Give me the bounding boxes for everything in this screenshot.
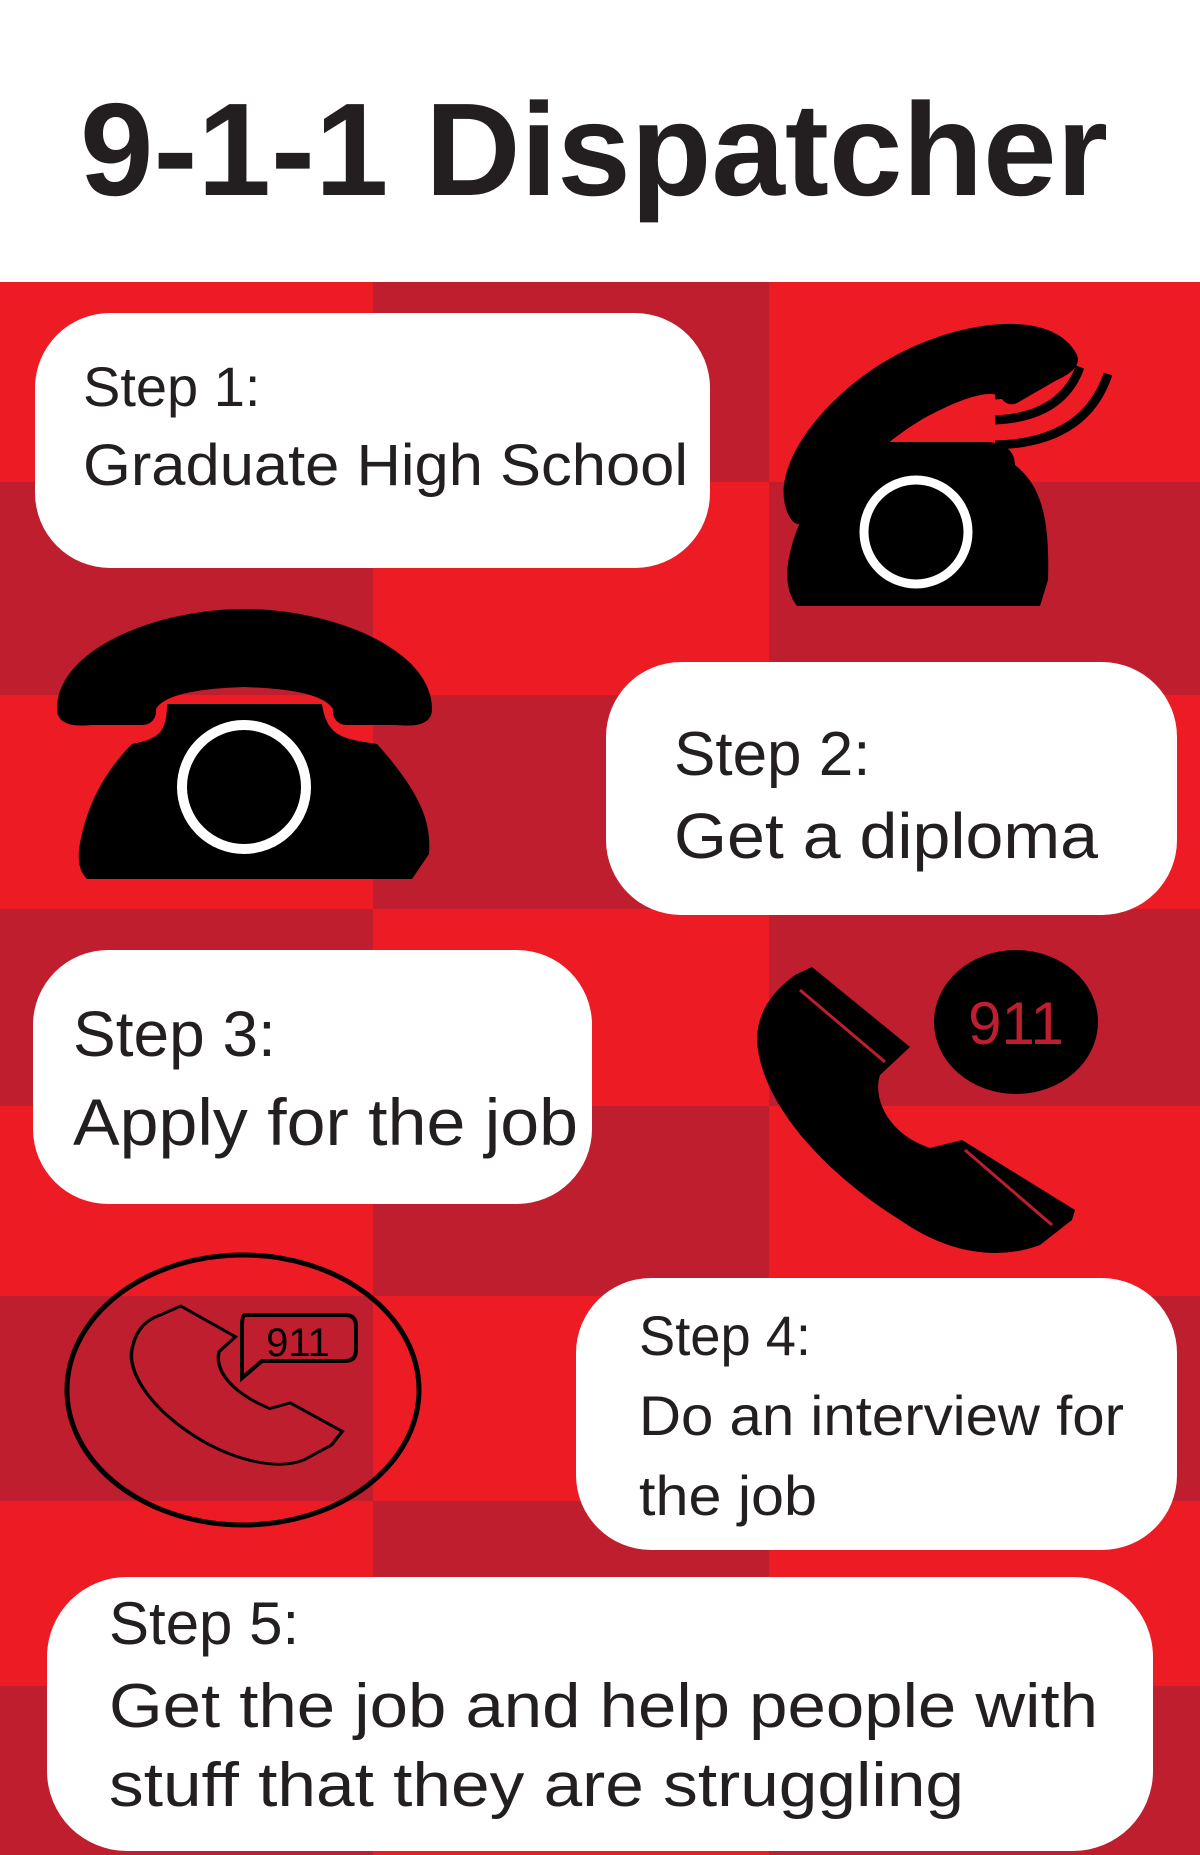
panel: step 2 bbox=[606, 662, 1177, 915]
panel: step 4: the job bbox=[639, 1464, 817, 1527]
panel: step 5: Get the job and help people with bbox=[109, 1672, 1098, 1741]
panel: step 1 bbox=[35, 313, 710, 568]
panel: step 1: Graduate High School bbox=[83, 433, 688, 498]
panel: step 4: Do an interview for bbox=[639, 1384, 1124, 1447]
panel: step 2: Step 2: bbox=[674, 720, 870, 789]
icon: outlined 911 call circle: 911 bbox=[266, 1321, 330, 1365]
panel: step 5: Step 5: bbox=[109, 1590, 299, 1657]
panel: step 3: Apply for the job bbox=[73, 1085, 578, 1159]
panel: step 4 bbox=[576, 1278, 1177, 1550]
panel: step 4: Step 4: bbox=[639, 1304, 811, 1367]
panel: step 1: Step 1: bbox=[83, 355, 260, 418]
icon: handset with 911 bubble bbox=[757, 950, 1098, 1253]
icon: outlined 911 call circle bbox=[67, 1255, 419, 1525]
icon: handset with 911 bubble: 911 bbox=[968, 990, 1064, 1057]
panel: step 5 bbox=[47, 1577, 1153, 1851]
panel: step 3 bbox=[33, 950, 592, 1204]
panel: step 5: stuff that they are struggling bbox=[109, 1751, 964, 1820]
title: 9-1-1 Dispatcher bbox=[80, 76, 1108, 223]
panel: step 3: Step 3: bbox=[73, 998, 276, 1070]
icon: classic telephone bbox=[57, 609, 432, 879]
icon: ringing telephone bbox=[746, 277, 1108, 606]
panel: step 2: Get a diploma bbox=[674, 800, 1098, 872]
